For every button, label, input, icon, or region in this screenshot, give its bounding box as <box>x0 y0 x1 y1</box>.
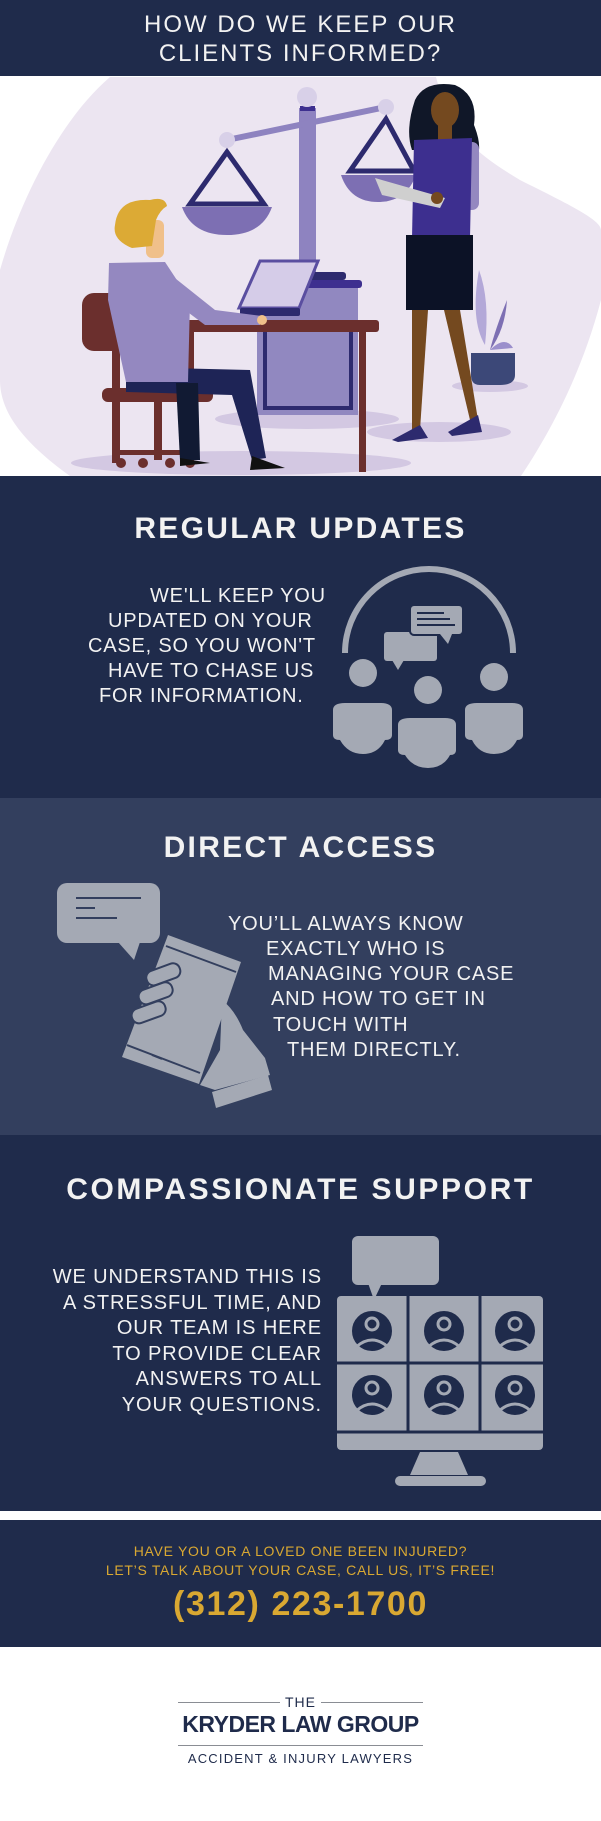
panel: regular updates <box>0 476 601 798</box>
text block: compassionate support <box>52 1266 322 1416</box>
text block: regular updates: FOR INFORMATION. <box>99 685 304 707</box>
panel: direct access <box>0 798 601 1135</box>
chair <box>82 293 213 468</box>
phone number: (312) 223-1700 <box>173 1585 428 1623</box>
panel: compassionate support <box>0 1135 601 1511</box>
text block: regular updates: UPDATED ON YOUR <box>108 610 313 632</box>
desk <box>180 320 379 472</box>
icon: group with chat bubbles <box>333 566 523 768</box>
cta text <box>106 1543 495 1578</box>
illustration: lawyer meeting client <box>0 77 601 476</box>
logo: the kryder law group: KRYDER LAW GROUP <box>182 1711 419 1737</box>
man <box>108 199 285 470</box>
text block: compassionate support: A STRESSFUL TIME, AND <box>63 1292 322 1314</box>
logo: the kryder law group <box>178 1694 423 1766</box>
cta text: HAVE YOU OR A LOVED ONE BEEN INJURED? <box>134 1543 467 1559</box>
text block: direct access: TOUCH WITH <box>273 1014 408 1036</box>
text block: regular updates: CASE, SO YOU WON'T <box>88 635 316 657</box>
text block: compassionate support: TO PROVIDE CLEAR <box>112 1342 322 1364</box>
icon: hand holding phone with chat bubble <box>57 883 272 1108</box>
logo: the kryder law group: ACCIDENT & INJURY LAWYERS <box>188 1751 413 1766</box>
text block: direct access: YOU’LL ALWAYS KNOW <box>228 913 464 935</box>
heading: regular updates: REGULAR UPDATES <box>134 512 467 545</box>
heading: direct access: DIRECT ACCESS <box>164 831 437 864</box>
text block: compassionate support: WE UNDERSTAND THIS IS <box>53 1266 322 1288</box>
heading: compassionate support: COMPASSIONATE SUPPORT <box>66 1173 535 1206</box>
cta text: LET’S TALK ABOUT YOUR CASE, CALL US, IT’S FREE! <box>106 1562 495 1578</box>
icon: monitor with video call grid <box>337 1236 543 1486</box>
title text: CLIENTS INFORMED? <box>159 40 442 67</box>
text block: regular updates: WE'LL KEEP YOU <box>150 585 326 607</box>
text block: direct access: THEM DIRECTLY. <box>287 1039 461 1061</box>
text block: compassionate support: OUR TEAM IS HERE <box>117 1317 322 1339</box>
text block: compassionate support: YOUR QUESTIONS. <box>122 1394 322 1416</box>
title text <box>144 11 457 67</box>
text block: direct access: EXACTLY WHO IS <box>266 938 445 960</box>
logo: the kryder law group: THE <box>285 1694 316 1710</box>
text block: direct access <box>228 913 514 1061</box>
call to action banner <box>0 1520 601 1647</box>
plant <box>471 270 515 385</box>
text block: regular updates: HAVE TO CHASE US <box>108 660 314 682</box>
title banner <box>0 0 601 76</box>
text block: compassionate support: ANSWERS TO ALL <box>136 1368 322 1390</box>
laptop <box>239 261 318 316</box>
text block: direct access: AND HOW TO GET IN <box>271 988 486 1010</box>
text block: direct access: MANAGING YOUR CASE <box>268 963 514 985</box>
woman <box>375 84 482 442</box>
scale <box>182 87 416 415</box>
text block: regular updates <box>88 585 326 707</box>
title text: HOW DO WE KEEP OUR <box>144 11 457 38</box>
